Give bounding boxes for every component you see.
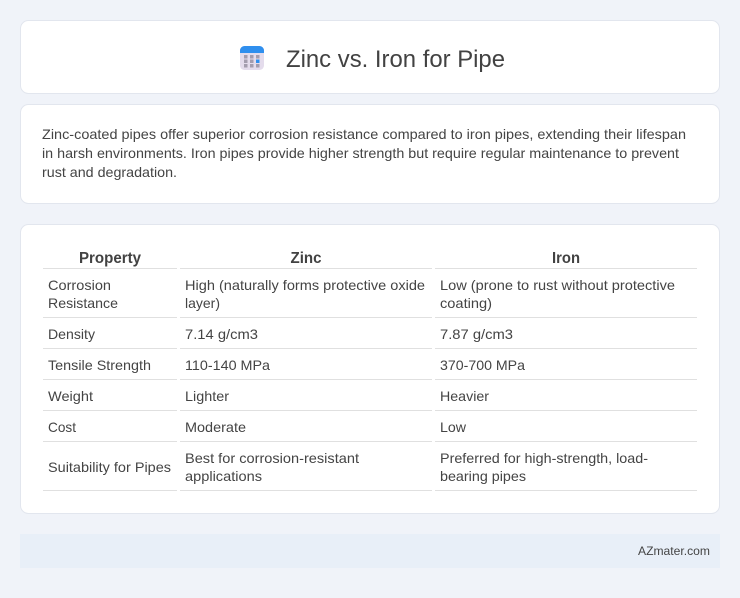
row: density: 7.87 g/cm3 <box>440 326 513 342</box>
row: density <box>48 326 513 342</box>
row: suitability for pipes <box>48 450 648 484</box>
row: corrosion resistance: High (naturally forms protective oxide <box>185 277 425 293</box>
row: weight <box>48 388 489 404</box>
row: suitability for pipes: Suitability for Pipes <box>48 459 171 475</box>
row: cost <box>48 419 467 435</box>
panel: comparison table <box>20 224 720 514</box>
row: cost: Low <box>440 419 467 435</box>
row: suitability for pipes: Preferred for high-strength, load- <box>440 450 648 466</box>
row: cost: Cost <box>48 419 76 435</box>
row: density: Density <box>48 326 95 342</box>
panel: title header <box>20 20 720 94</box>
text block: summary: in harsh environments. Iron pipes provide higher strength but require regular maintenance to prevent <box>42 145 679 161</box>
text block: summary: rust and degradation. <box>42 164 177 180</box>
row: weight: Weight <box>48 388 93 404</box>
row: corrosion resistance <box>48 277 675 311</box>
icon: calendar <box>240 46 264 70</box>
row: weight: Heavier <box>440 388 489 404</box>
row: density: 7.14 g/cm3 <box>185 326 258 342</box>
row: cost: Moderate <box>185 419 246 435</box>
table header: Property <box>79 250 141 267</box>
row: corrosion resistance: coating) <box>440 295 492 311</box>
row: suitability for pipes: bearing pipes <box>440 468 526 484</box>
row: tensile strength <box>48 357 525 373</box>
row: suitability for pipes: applications <box>185 468 262 484</box>
table header: Zinc <box>290 250 322 267</box>
row: suitability for pipes: Best for corrosion-resistant <box>185 450 359 466</box>
footer credit: AZmater.com <box>638 544 710 558</box>
table header: Iron <box>552 250 580 267</box>
row: tensile strength: 370-700 MPa <box>440 357 525 373</box>
row: corrosion resistance: Corrosion <box>48 277 111 293</box>
row: corrosion resistance: layer) <box>185 295 220 311</box>
row: weight: Lighter <box>185 388 229 404</box>
row: corrosion resistance: Resistance <box>48 295 118 311</box>
row: corrosion resistance: Low (prone to rust without protective <box>440 277 675 293</box>
title: Zinc vs. Iron for Pipe <box>286 46 505 73</box>
panel: intro text <box>20 104 720 204</box>
row: tensile strength: 110-140 MPa <box>185 357 270 373</box>
text block: summary <box>42 126 686 180</box>
table header <box>79 250 580 267</box>
row: tensile strength: Tensile Strength <box>48 357 151 373</box>
text block: summary: Zinc-coated pipes offer superior corrosion resistance compared to iron pipes, extending their lifespan <box>42 126 686 142</box>
footer bar <box>20 534 720 568</box>
